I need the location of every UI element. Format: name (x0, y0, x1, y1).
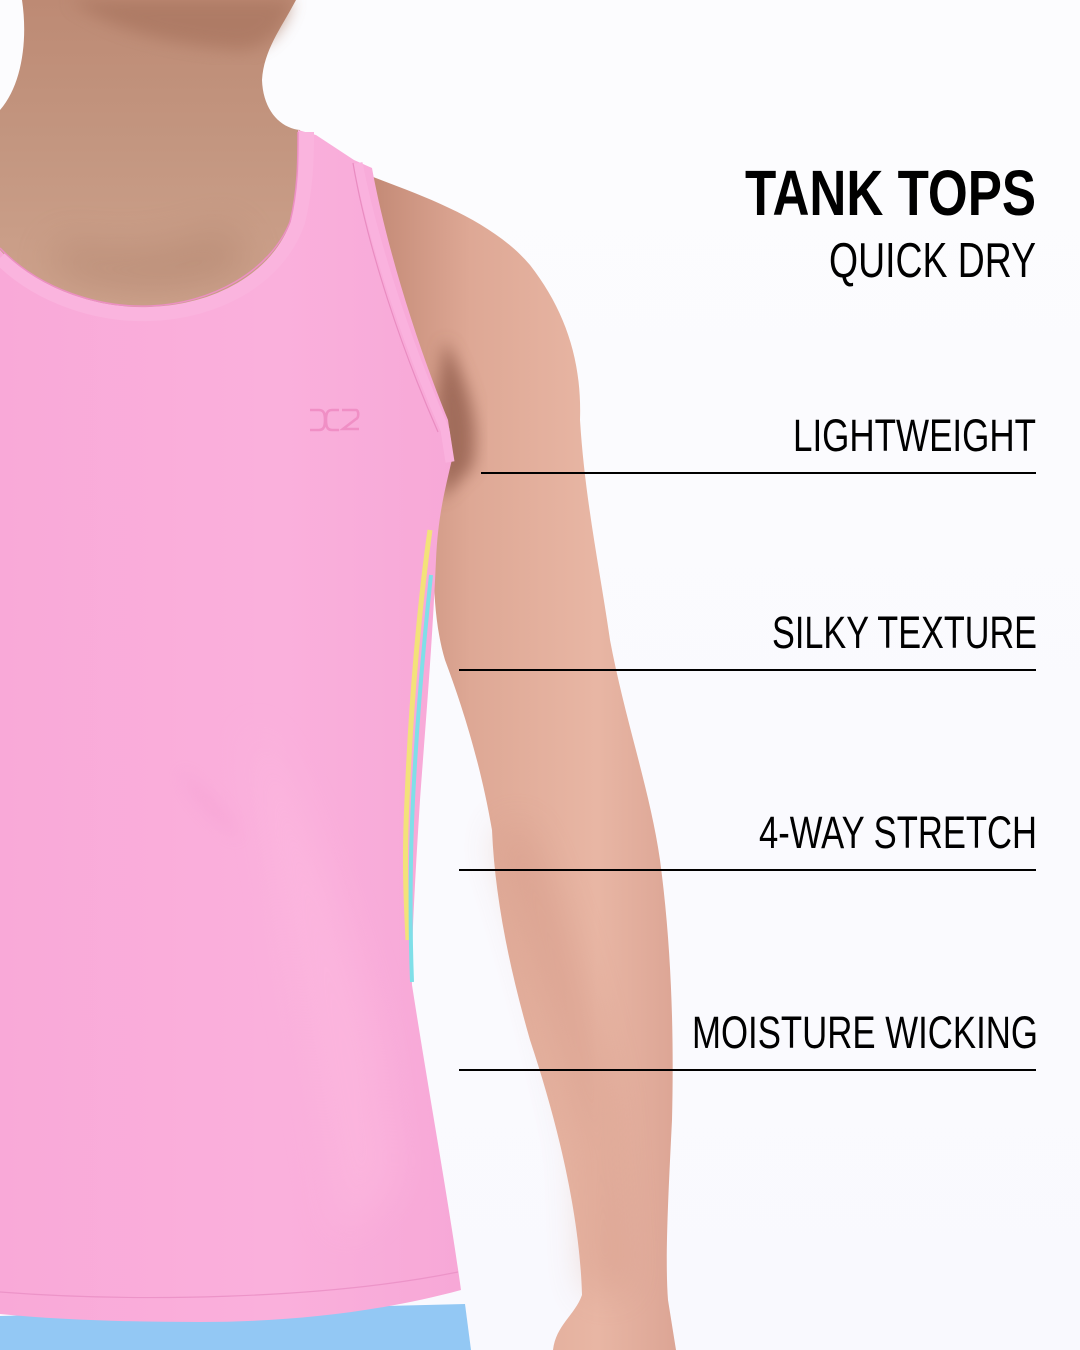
neckline binding (0, 132, 307, 314)
forearm shading (500, 820, 625, 1290)
armpit shadow (436, 340, 476, 500)
title block (745, 157, 1036, 288)
chest centre shadow (50, 225, 250, 294)
tank top soft shading (250, 720, 400, 1240)
armhole binding (358, 163, 450, 462)
shorts (0, 1304, 471, 1350)
logo on tank (310, 410, 359, 430)
tank top body (0, 130, 461, 1322)
model photo (0, 0, 676, 1350)
arm (360, 172, 676, 1350)
side stripes (405, 530, 431, 982)
chin shadow (70, 0, 292, 50)
neck and chest (0, 0, 345, 320)
tank crease shadow (180, 770, 240, 840)
hem stitch (0, 1272, 458, 1297)
